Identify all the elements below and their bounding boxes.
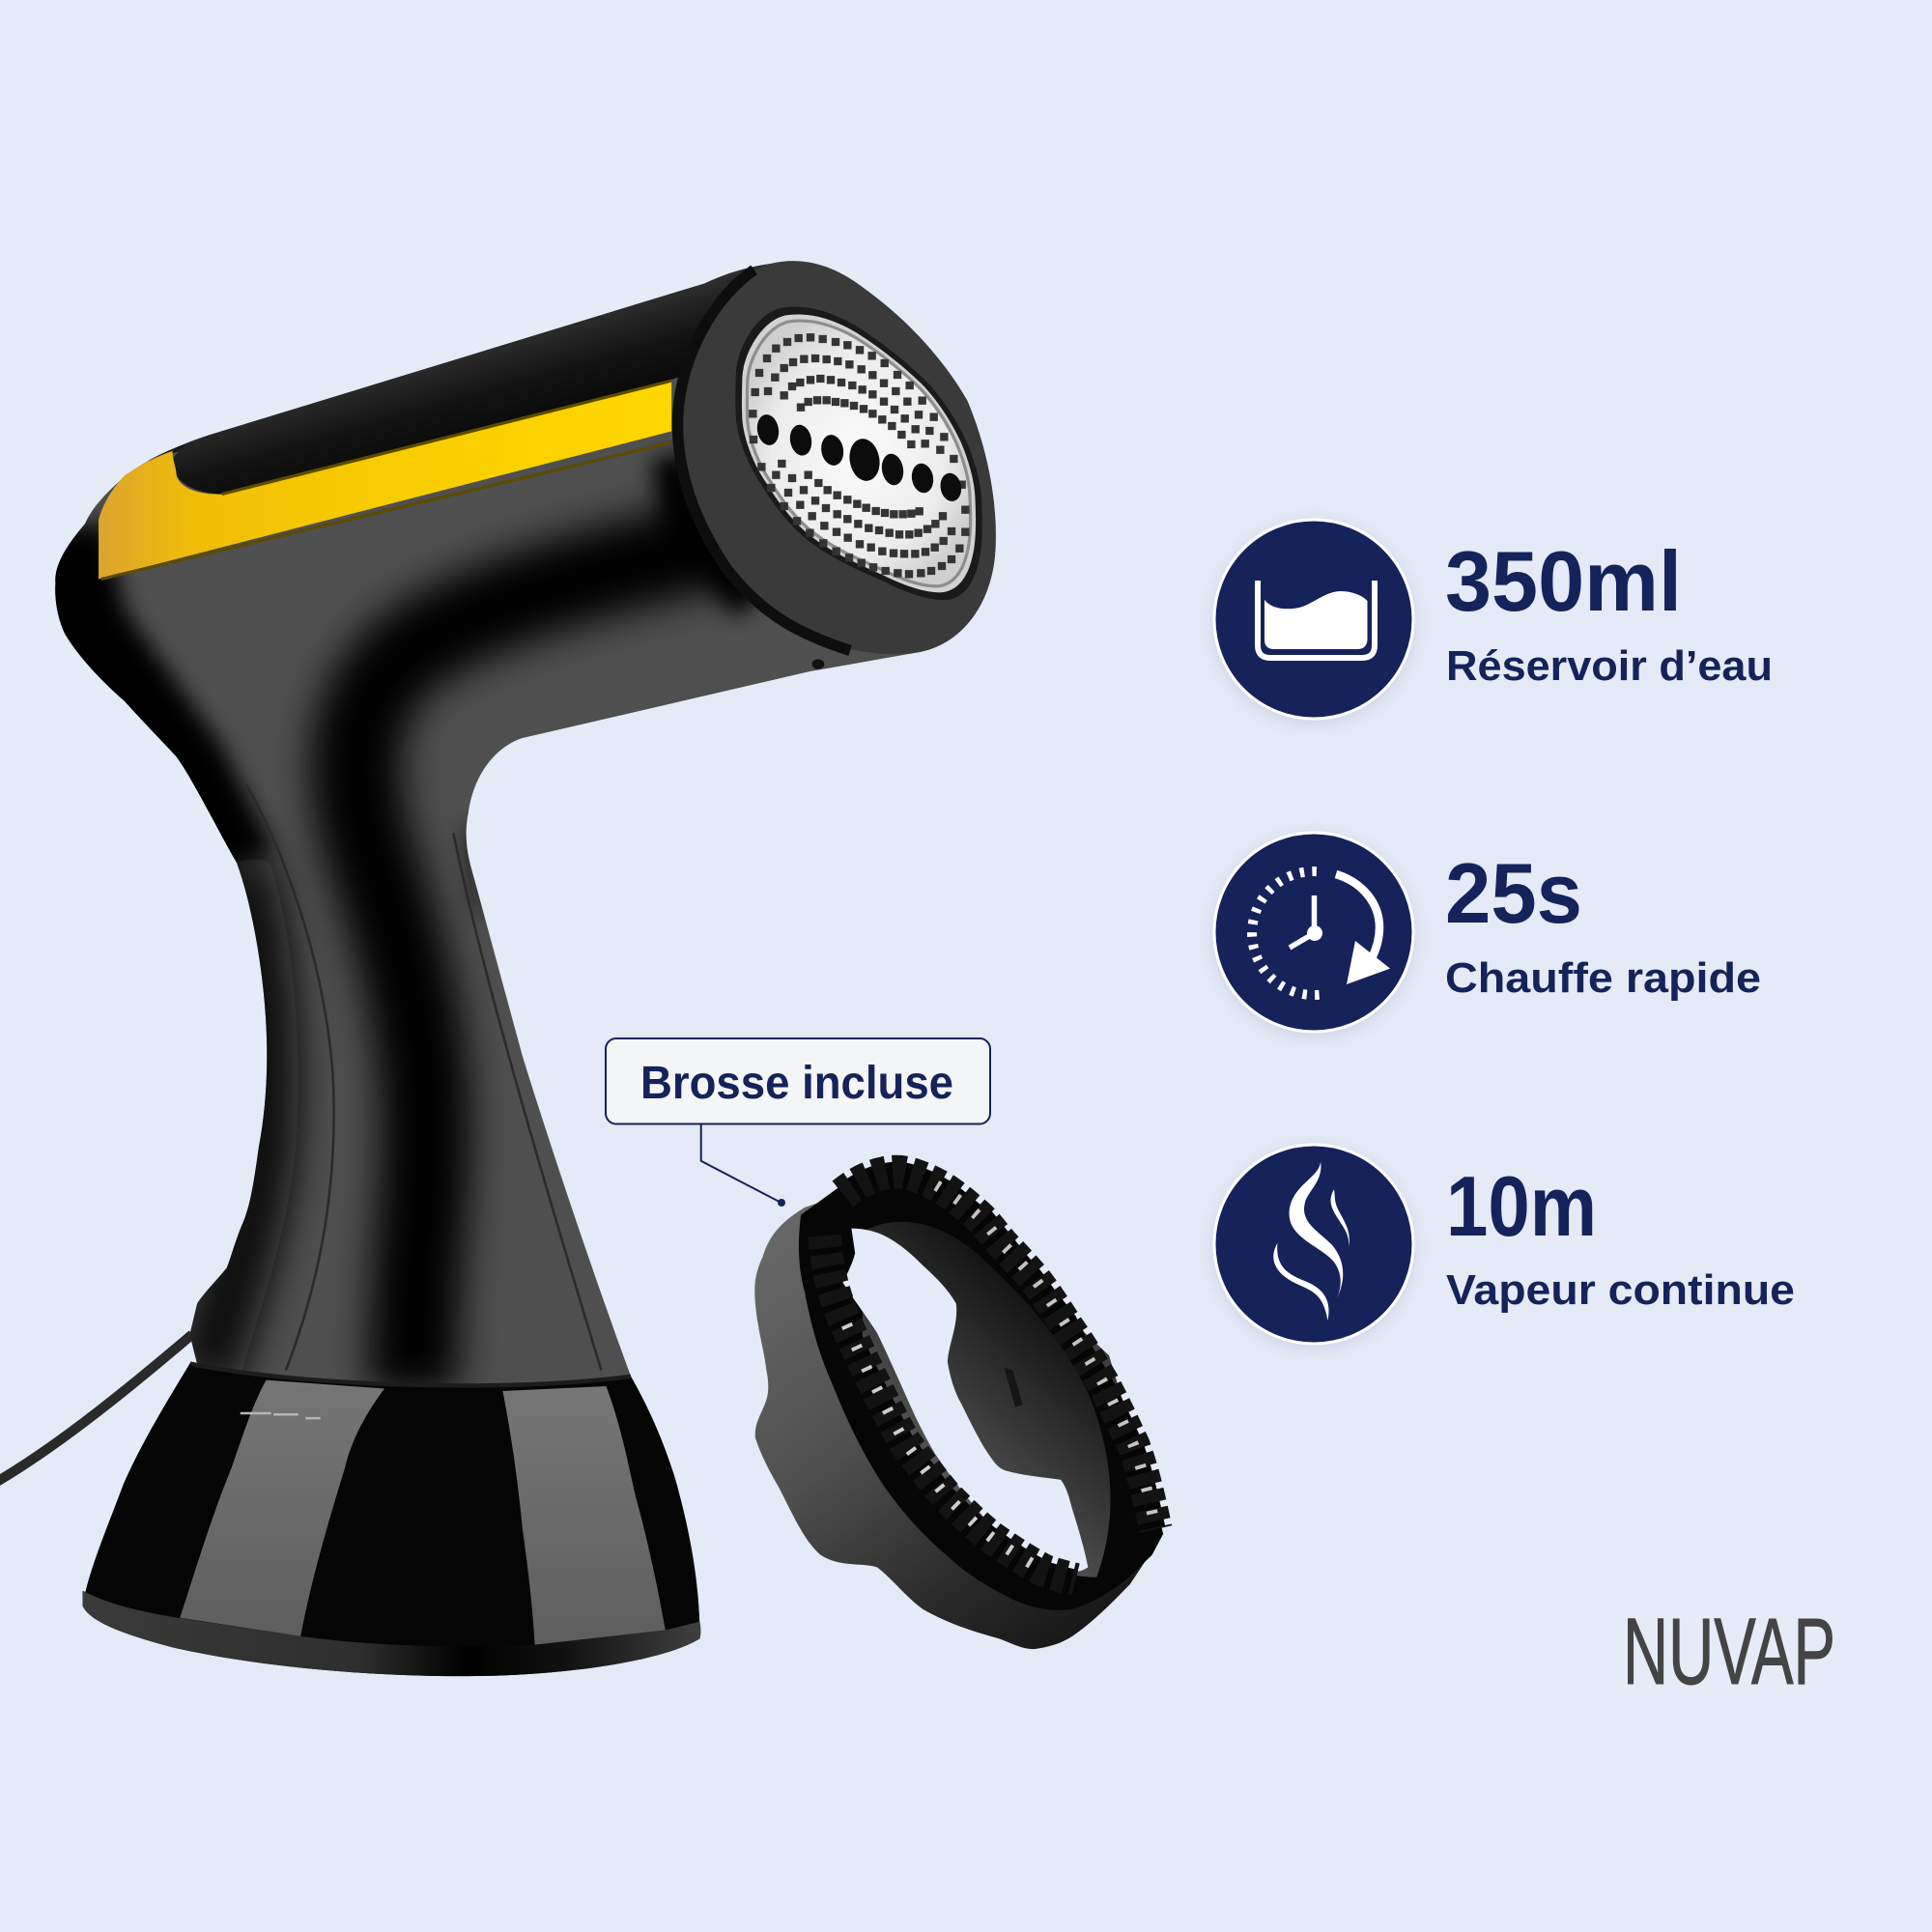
label: reservoir: Réservoir d’eau (1446, 642, 1773, 690)
callout label: Brosse incluse (640, 1058, 953, 1109)
brush accessory (754, 1166, 1163, 1649)
steamer body and neck (55, 264, 915, 1383)
slot in plate (1005, 1368, 1023, 1407)
logo: NUVAP: NUVAP (1623, 1599, 1835, 1704)
product: garment steamer (0, 222, 1010, 1676)
grille inner ring (747, 321, 971, 586)
brush inner plate (863, 1222, 1110, 1577)
label: chauffe rapide: Chauffe rapide (1445, 954, 1761, 1002)
top band and dark slot (172, 252, 770, 494)
steamer grille (735, 307, 982, 600)
hose port dot (812, 659, 824, 669)
callout dot (778, 1199, 785, 1207)
neck seam lines (246, 784, 601, 1370)
callout: brosse incluse (606, 1038, 990, 1207)
callout box (606, 1038, 990, 1124)
feature: heating time (1214, 833, 1761, 1032)
value: 350ml: 350ml (1445, 533, 1682, 629)
icon: clock with arrow (1214, 833, 1413, 1032)
base top seam (191, 1364, 631, 1385)
icon: water tank (1214, 520, 1413, 719)
brush opening (842, 1229, 1088, 1572)
callout leader line (701, 1124, 781, 1203)
value: 25s: 25s (1445, 845, 1582, 941)
rim dark edge (677, 270, 850, 650)
upper bristle band (842, 1172, 1155, 1529)
brush outer body (754, 1171, 1163, 1649)
small perforations (753, 337, 965, 574)
grille dark ring (735, 307, 982, 600)
feature: continuous steam (1214, 1145, 1795, 1344)
icon: steam (1214, 1145, 1413, 1344)
yellow stripe (99, 380, 671, 579)
feature: water tank (1214, 520, 1773, 719)
steamer base (82, 1361, 700, 1676)
large steam holes (754, 412, 963, 503)
brush black ring (799, 1166, 1163, 1610)
steamer face rim (674, 261, 996, 654)
power cord (0, 1334, 192, 1484)
value: 10m: 10m (1446, 1158, 1597, 1254)
lower bristle band (824, 1236, 1076, 1579)
grille steel plate (742, 315, 976, 592)
yellow stripe edges (101, 381, 671, 579)
label: vapeur continue: Vapeur continue (1446, 1266, 1795, 1314)
